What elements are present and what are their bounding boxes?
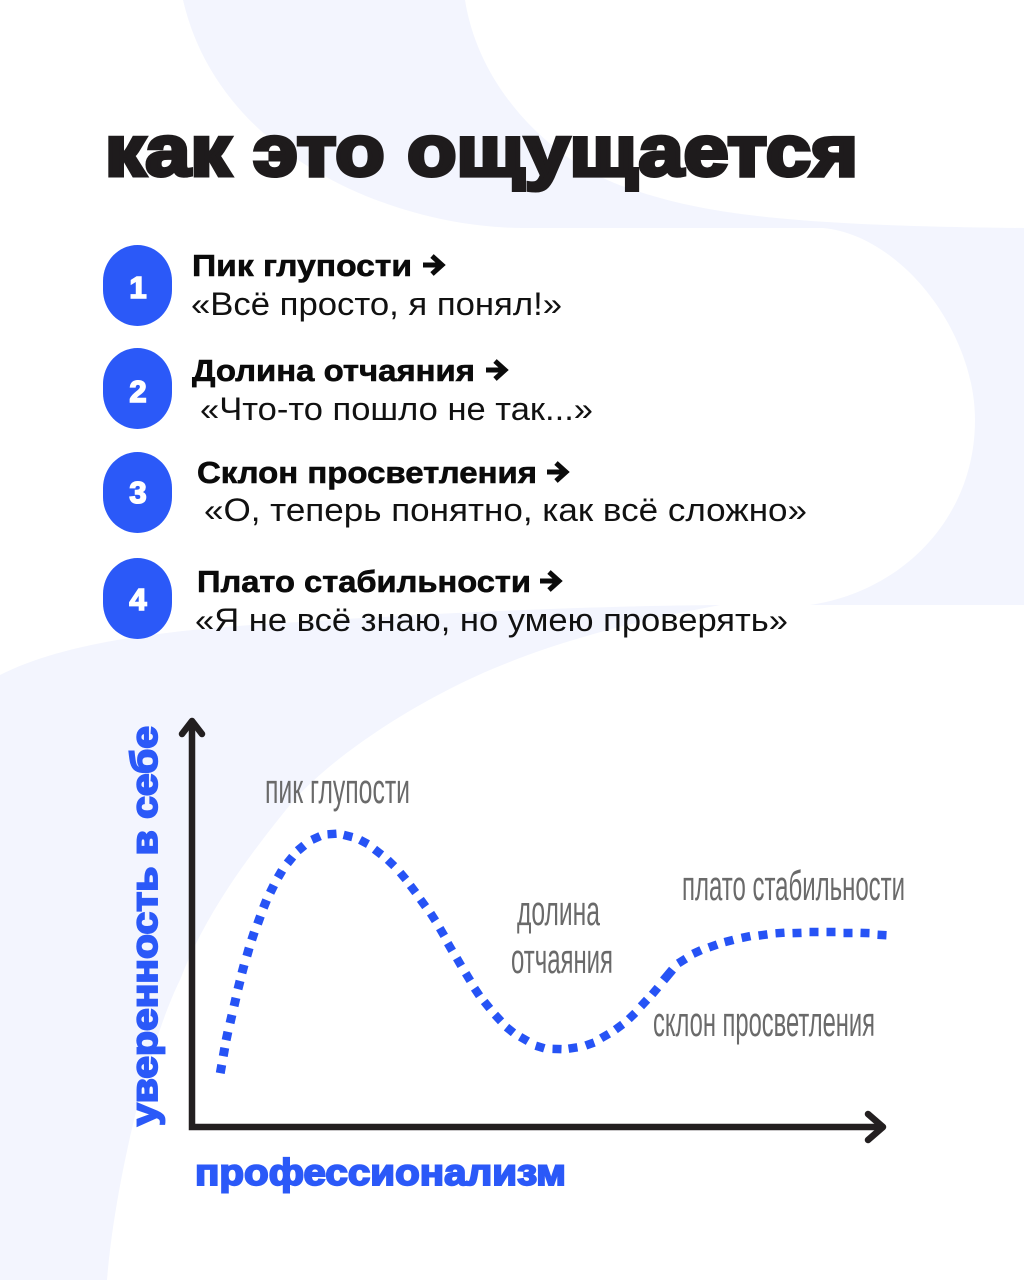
heading 4: Плато стабильности	[197, 564, 531, 599]
badge 4: 4	[129, 582, 147, 617]
y axis label: уверенность в себе	[124, 726, 165, 1126]
badge 3: 3	[129, 475, 147, 510]
axes with arrows	[182, 721, 883, 1140]
quote 4: «Я не всё знаю, но умею проверять»	[195, 602, 788, 638]
icon: arrow 4	[540, 572, 559, 590]
heading 3: Склон просветления	[197, 455, 537, 490]
list item 4	[103, 558, 788, 639]
x axis label: профессионализм	[195, 1152, 566, 1193]
list item 3	[103, 452, 807, 533]
list item 1	[103, 245, 562, 326]
heading 1: Пик глупости	[192, 248, 412, 283]
badge 2	[103, 348, 172, 429]
curve label: valley line 2: отчаяния	[511, 935, 613, 982]
panel: numbered list	[103, 245, 807, 639]
icon: arrow 1	[423, 256, 442, 274]
chart: confidence curve	[124, 721, 905, 1193]
icon: arrow 2	[486, 361, 505, 379]
list item 2	[103, 348, 593, 429]
quote 2: «Что-то пошло не так...»	[200, 391, 593, 427]
curve label: valley line 1: долина	[517, 887, 600, 934]
badge 3	[103, 452, 172, 533]
badge 1	[103, 245, 172, 326]
badge 1: 1	[129, 270, 147, 305]
badge 4	[103, 558, 172, 639]
curve label: peak: пик глупости	[265, 765, 410, 812]
quote 1: «Всё просто, я понял!»	[191, 286, 562, 322]
badge 2: 2	[129, 374, 147, 409]
quote 3: «О, теперь понятно, как всё сложно»	[204, 492, 807, 528]
icon: arrow 3	[547, 463, 566, 481]
heading 2: Долина отчаяния	[192, 353, 475, 388]
dotted curve	[216, 829, 887, 1074]
title: как это ощущается	[105, 112, 858, 192]
